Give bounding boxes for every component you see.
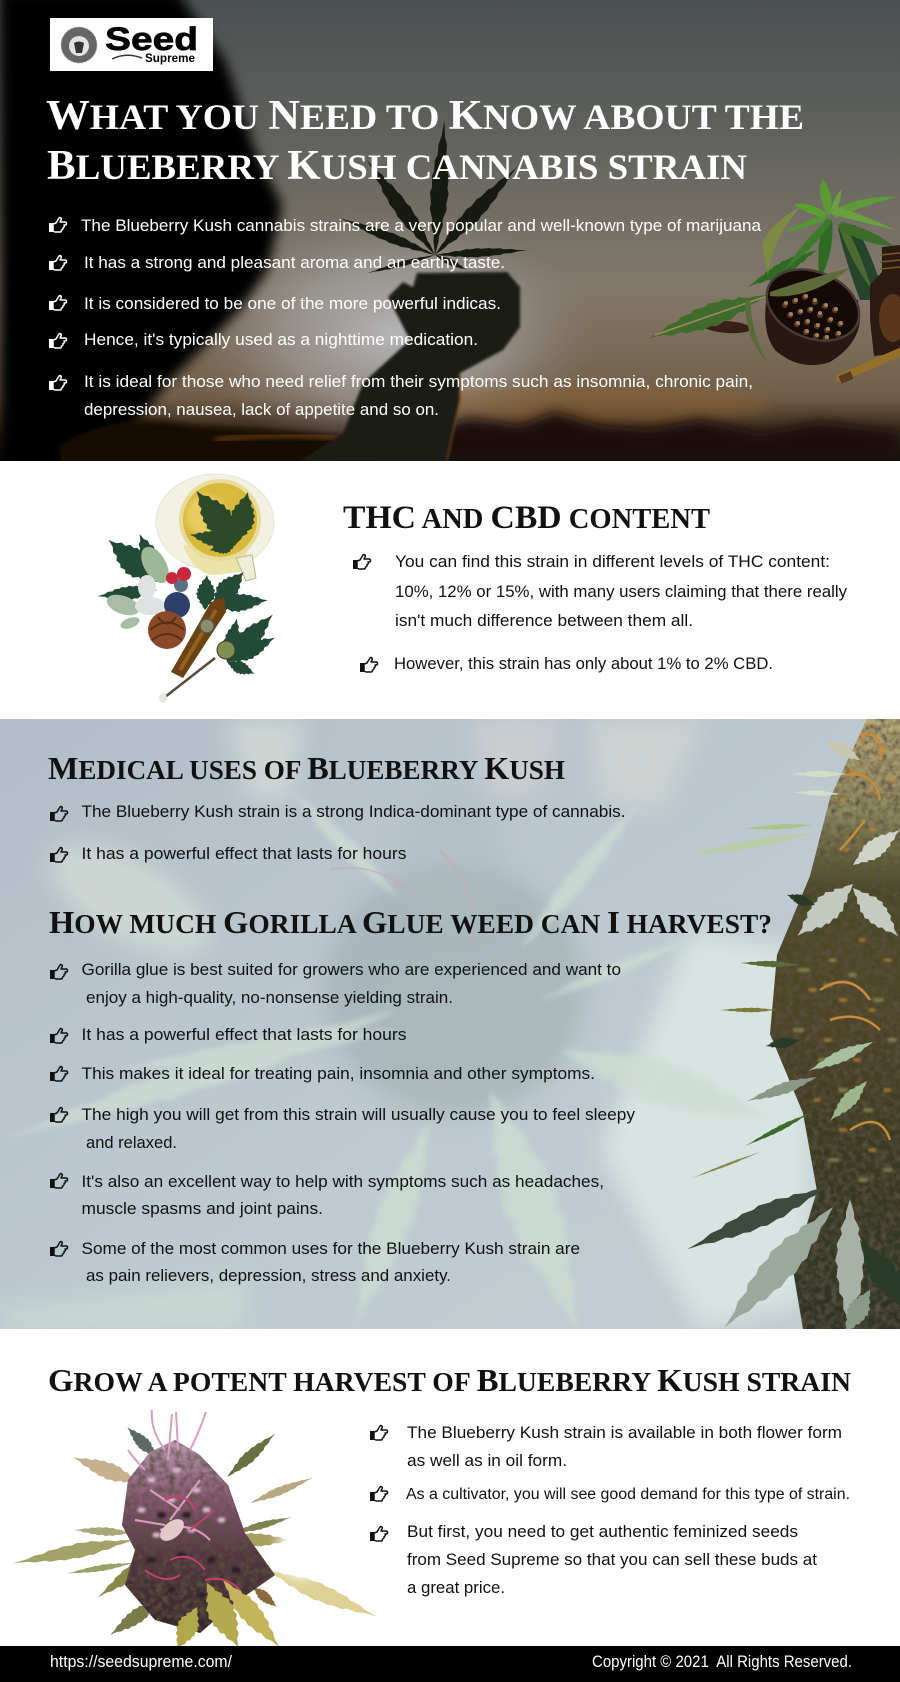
bullet list: grow: As a cultivator, you will see good demand for this type of strain. [406, 1486, 850, 1503]
title: BLUEBERRY KUSH CANNABIS STRAIN [47, 143, 747, 189]
bullet list: harvest: enjoy a high-quality, no-nonsense yielding strain. [86, 989, 453, 1007]
bullet list: harvest: It's also an excellent way to help with symptoms such as headaches, [82, 1173, 604, 1191]
faded bud background [0, 719, 900, 1344]
logo: Supreme [145, 53, 195, 65]
bullet list: overview: It is considered to be one of the more powerful indicas. [84, 295, 501, 313]
bullet list: THC and CBD: 10%, 12% or 15%, with many users claiming that there really [395, 583, 848, 601]
bullet list: THC and CBD [353, 553, 848, 673]
bullet list: overview: Hence, it's typically used as a nighttime medication. [84, 331, 478, 349]
title [46, 101, 802, 180]
bullet list: harvest: and relaxed. [86, 1134, 177, 1152]
icon: cannabis cola [683, 719, 900, 1339]
icon: plant, seed bowl and bottle [644, 179, 900, 380]
heading: medical uses: MEDICAL USES OF BLUEBERRY KUSH [48, 750, 565, 786]
bullet list: grow: a great price. [407, 1579, 505, 1597]
bullet list: harvest: The high you will get from this strain will usually cause you to feel sleepy [82, 1106, 636, 1124]
footer: Copyright © 2021 All Rights Reserved. [592, 1653, 852, 1671]
bullet list: THC and CBD: isn't much difference between them all. [395, 612, 693, 630]
bullet list: grow: The Blueberry Kush strain is available in both flower form [407, 1424, 842, 1442]
bullet list: medical uses: It has a powerful effect that lasts for hours [82, 845, 407, 863]
icon: purple bud [12, 1410, 381, 1654]
icon: tea and herbs [97, 474, 281, 703]
bullet list: overview: It has a strong and pleasant aroma and an earthy taste. [84, 254, 505, 272]
bullet list: grow: But first, you need to get authentic feminized seeds [407, 1523, 798, 1541]
bullet list: grow: as well as in oil form. [407, 1452, 567, 1470]
footer [0, 1646, 900, 1682]
heading: grow: GROW A POTENT HARVEST OF BLUEBERRY KUSH STRAIN [48, 1362, 852, 1398]
bullet list: THC and CBD: You can find this strain in different levels of THC content: [395, 553, 830, 571]
footer: https://seedsupreme.com/ [50, 1653, 232, 1671]
bullet list: grow [370, 1424, 850, 1597]
bullet list: harvest: Some of the most common uses for the Blueberry Kush strain are [82, 1240, 580, 1258]
heading: THC and CBD content: THC AND CBD CONTENT [343, 500, 710, 536]
icon: hand holding leaf [300, 120, 528, 461]
panel: medical uses and harvest [0, 719, 900, 1344]
heading: harvest: HOW MUCH GORILLA GLUE WEED CAN I HARVEST? [49, 904, 772, 940]
hero photo background [0, 0, 900, 470]
bullet list: overview: The Blueberry Kush cannabis strains are a very popular and well-known type of marijuana [81, 217, 762, 235]
logo: Seed [105, 21, 198, 57]
bullet list: harvest: muscle spasms and joint pains. [82, 1200, 323, 1218]
bullet list: overview: It is ideal for those who need relief from their symptoms such as insomnia, chronic pain, [84, 373, 753, 391]
bullet list: medical uses [50, 803, 626, 863]
bullet list: harvest: as pain relievers, depression, stress and anxiety. [86, 1267, 451, 1285]
panel: THC and CBD content [0, 461, 900, 719]
title: WHAT YOU NEED TO KNOW ABOUT THE [46, 93, 804, 139]
bullet list: harvest: It has a powerful effect that lasts for hours [82, 1026, 407, 1044]
bullet list: overview [49, 217, 762, 419]
bullet list: harvest [50, 961, 636, 1285]
bullet list: harvest: This makes it ideal for treating pain, insomnia and other symptoms. [82, 1065, 595, 1083]
bullet list: THC and CBD: However, this strain has only about 1% to 2% CBD. [394, 655, 773, 673]
bullet list: harvest: Gorilla glue is best suited for growers who are experienced and want to [82, 961, 621, 979]
panel: grow a potent harvest [14, 1370, 851, 1646]
bullet list: grow: from Seed Supreme so that you can sell these buds at [407, 1551, 817, 1569]
logo [50, 18, 213, 71]
bullet list: medical uses: The Blueberry Kush strain is a strong Indica-dominant type of cannabis. [82, 803, 626, 821]
panel: hero [0, 0, 900, 470]
bullet list: overview: depression, nausea, lack of appetite and so on. [84, 401, 439, 419]
